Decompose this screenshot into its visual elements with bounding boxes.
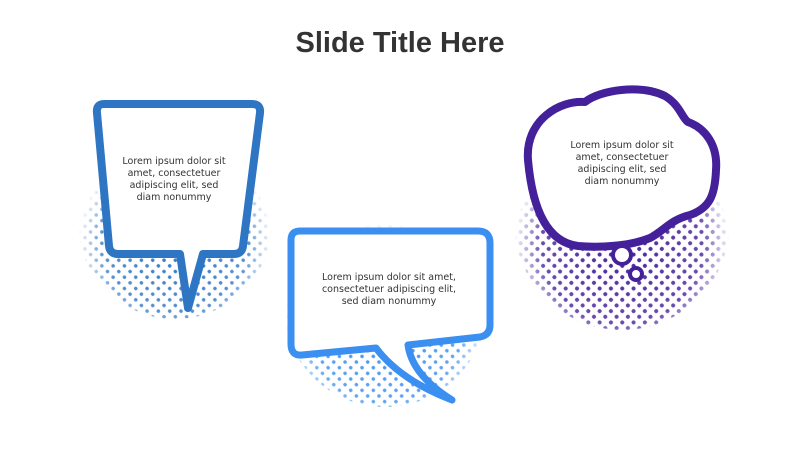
text left	[122, 156, 226, 203]
panel: middle speech bubble	[286, 225, 494, 407]
text left: diam nonummy	[137, 192, 212, 203]
text middle: consectetuer adipiscing elit,	[322, 284, 456, 295]
text right: Lorem ipsum dolor sit	[570, 140, 674, 151]
text left: Lorem ipsum dolor sit	[122, 156, 226, 167]
title: Slide Title Here	[296, 27, 504, 59]
text right: diam nonummy	[585, 176, 660, 187]
text right: adipiscing elit, sed	[578, 164, 666, 175]
bubble left	[97, 104, 260, 308]
text middle: Lorem ipsum dolor sit amet,	[322, 272, 456, 283]
text left: amet, consectetuer	[128, 168, 221, 179]
thought circles	[613, 246, 631, 264]
text middle: sed diam nonummy	[342, 296, 437, 307]
text middle	[322, 272, 456, 307]
halftone right	[516, 197, 728, 330]
halftone middle	[286, 225, 480, 407]
halftone left	[80, 190, 270, 319]
text right: amet, consectetuer	[576, 152, 669, 163]
bubble middle	[291, 231, 490, 400]
text right	[570, 140, 674, 187]
panel: right thought bubble	[510, 89, 735, 335]
panel: left speech bubble	[80, 100, 270, 319]
cloud bubble	[528, 89, 716, 247]
text left: adipiscing elit, sed	[130, 180, 218, 191]
